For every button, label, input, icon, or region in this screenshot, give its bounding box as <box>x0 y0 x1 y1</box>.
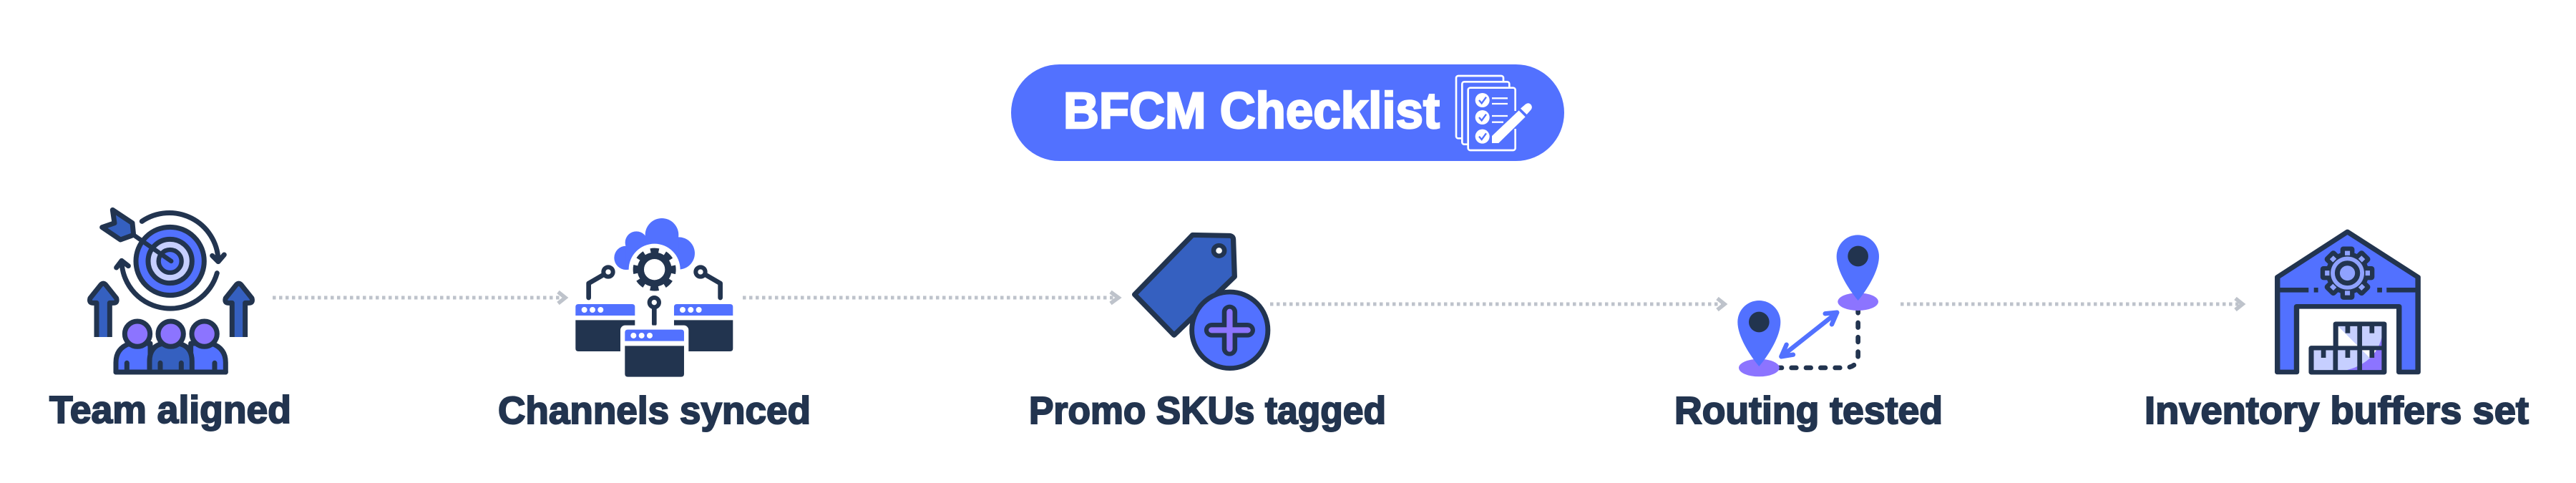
label: Team aligned <box>49 389 291 431</box>
arrow: promo to routing <box>1270 298 1724 310</box>
icon: map pins and route <box>1737 235 1879 376</box>
arrow: team to channels <box>273 292 565 303</box>
icon: checklist papers and pen <box>1456 76 1532 150</box>
step 5: inventory buffers set <box>2145 232 2529 432</box>
label: Routing tested <box>1674 389 1943 432</box>
icon: price tag with plus <box>1135 235 1268 369</box>
icon: warehouse with boxes <box>2278 232 2418 372</box>
title text: BFCM Checklist <box>1063 83 1440 140</box>
label: Inventory buffers set <box>2145 389 2529 432</box>
icon: target with team <box>89 210 252 372</box>
arrow: routing to inventory <box>1901 298 2243 310</box>
step 4: routing tested <box>1674 235 1943 432</box>
arrow: channels to promo <box>743 292 1118 303</box>
label: Promo SKUs tagged <box>1029 389 1386 432</box>
step 1: team aligned <box>49 210 291 431</box>
step 3: promo SKUs tagged <box>1029 235 1386 432</box>
icon: cloud, gear and windows <box>575 218 733 380</box>
step 2: channels synced <box>498 218 811 432</box>
pill background <box>1011 64 1564 161</box>
label: Channels synced <box>498 389 811 432</box>
title pill <box>1011 64 1564 161</box>
